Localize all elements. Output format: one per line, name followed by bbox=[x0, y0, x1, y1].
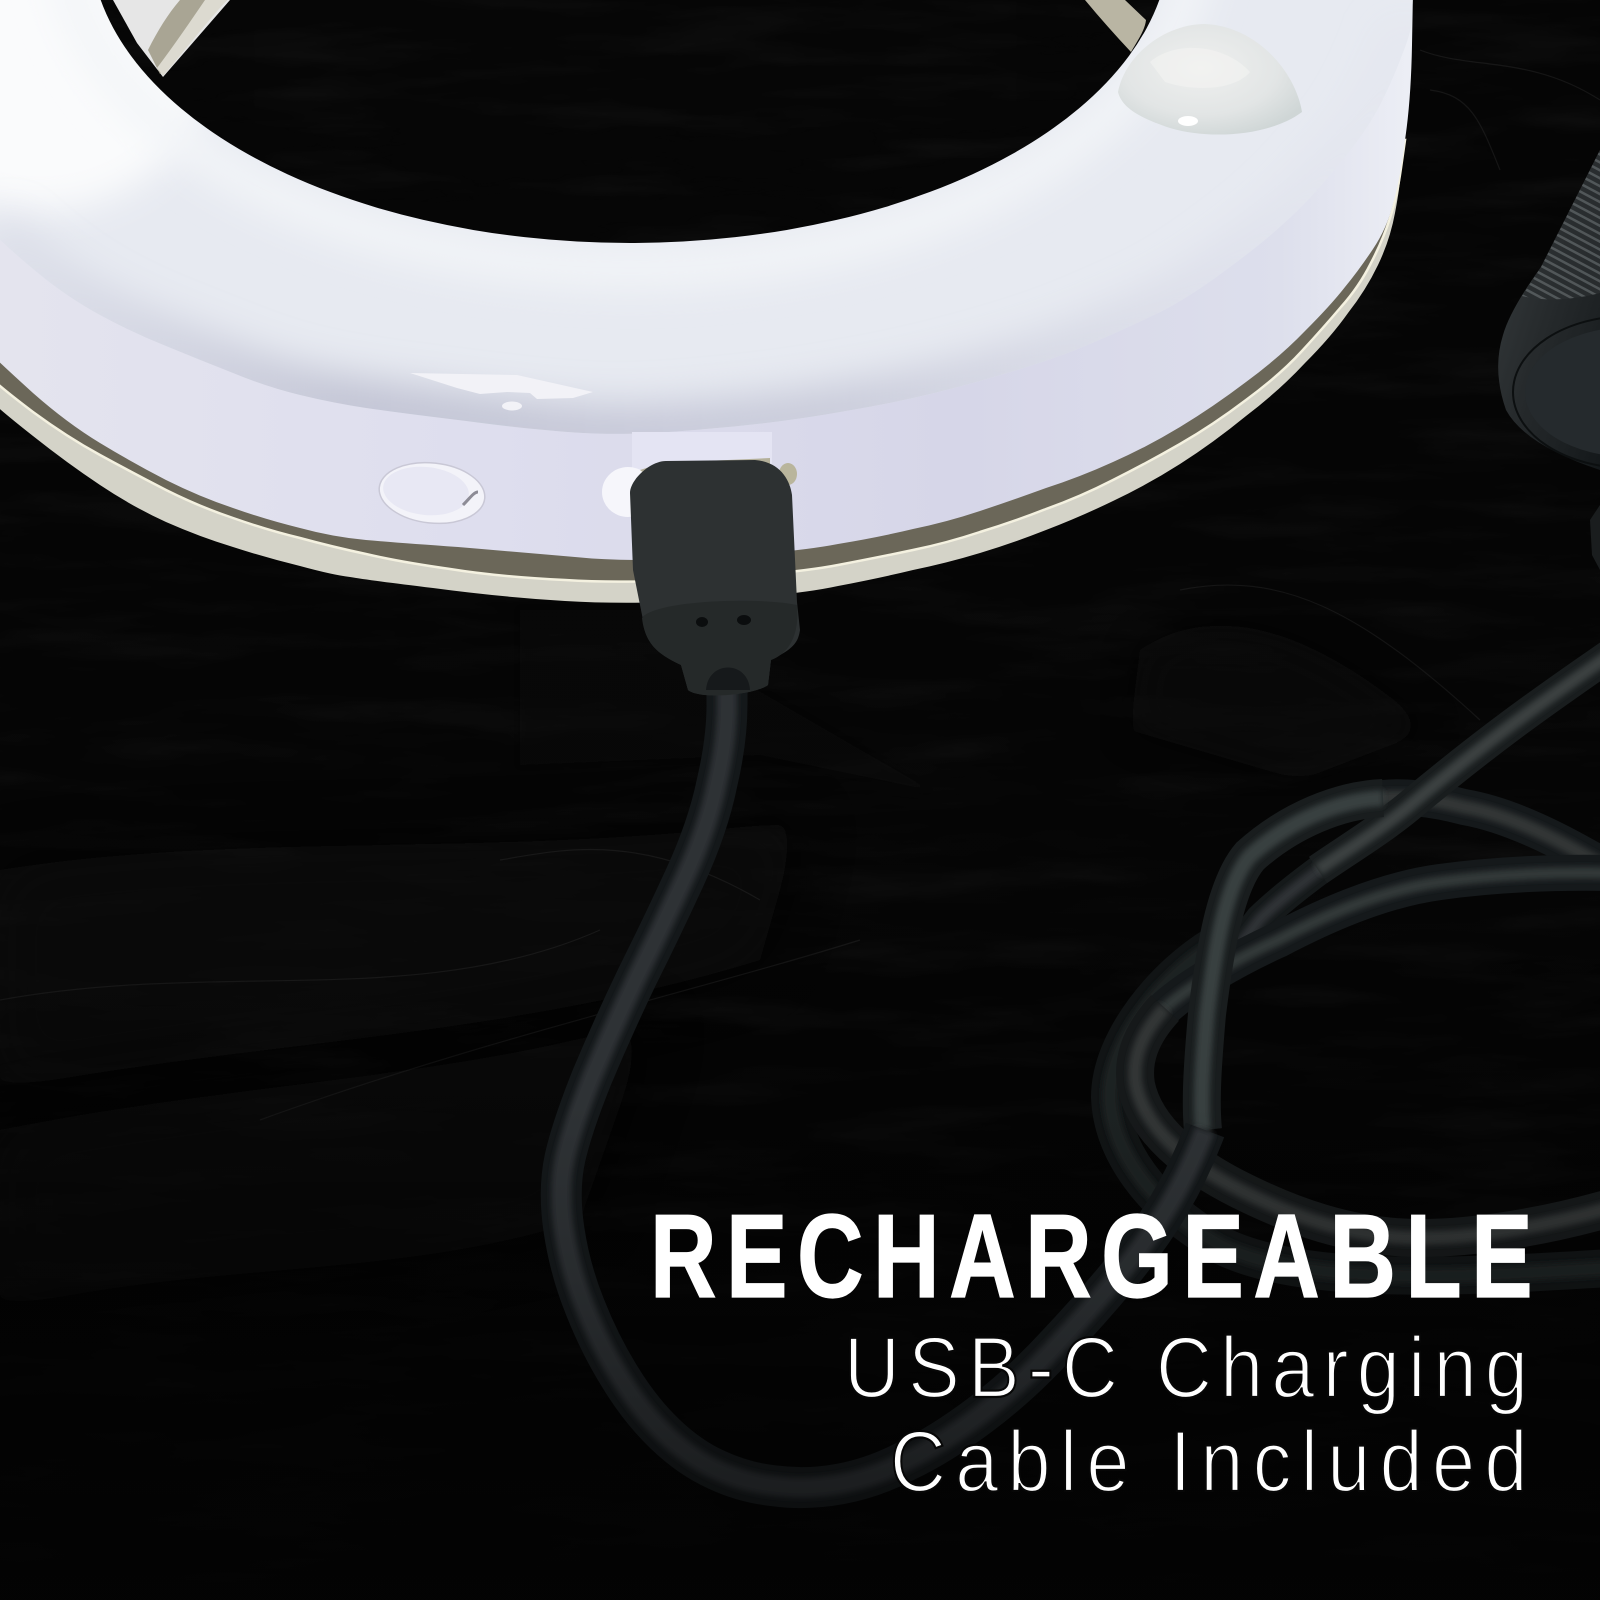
ring top face bbox=[0, 0, 1420, 450]
usb-c plug bbox=[630, 460, 800, 695]
subheading: usb-c charging cable included: USB-C Charging bbox=[844, 1320, 1536, 1416]
power button bbox=[376, 458, 488, 528]
cable bundle at right bbox=[1110, 655, 1600, 1276]
metal base rim bbox=[0, 140, 1405, 603]
centre hole bbox=[100, 0, 1160, 243]
handle / grip at right edge bbox=[1498, 150, 1600, 570]
motion sensor dome bbox=[1118, 24, 1302, 135]
usb port opening bbox=[602, 432, 797, 517]
ring light bbox=[0, 0, 1413, 696]
ring body side wall bbox=[0, 0, 1413, 560]
subheading: usb-c charging cable included: Cable Included bbox=[890, 1414, 1537, 1510]
fade over lower cables bbox=[0, 1100, 1600, 1600]
charging cable from plug bbox=[561, 670, 1205, 1488]
heading: rechargeable: RECHARGEABLE bbox=[650, 1190, 1542, 1323]
gloss highlight bbox=[410, 373, 593, 410]
subheading: usb-c charging cable included bbox=[844, 1320, 1537, 1510]
